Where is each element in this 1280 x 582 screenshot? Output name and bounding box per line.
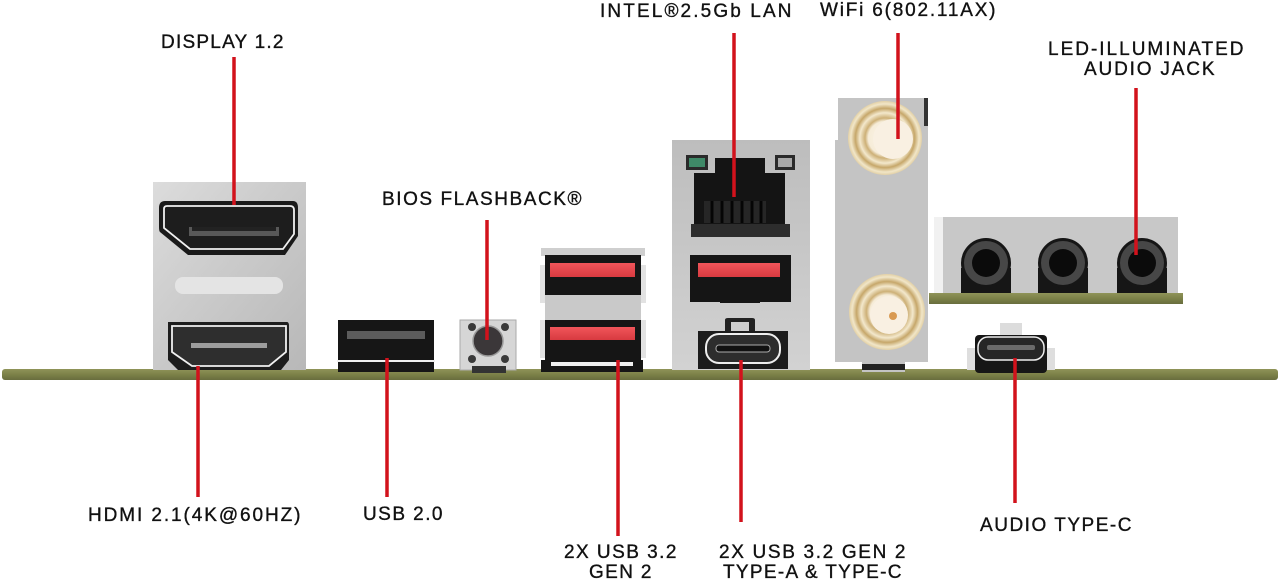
label: LED audio jack: LED-ILLUMINATED <box>1048 39 1245 60</box>
audio USB Type-C port <box>967 323 1055 373</box>
label: USB 2.0: USB 2.0 <box>363 504 444 525</box>
USB 2.0 port <box>337 320 435 372</box>
label: LED audio jack: AUDIO JACK <box>1084 59 1216 80</box>
lower USB port <box>545 320 641 360</box>
label: DisplayPort: DISPLAY 1.2 <box>161 32 285 53</box>
label: WiFi: WiFi 6(802.11AX) <box>820 0 997 21</box>
label: LAN: INTEL®2.5Gb LAN <box>600 1 793 22</box>
USB-A port <box>690 255 791 303</box>
leader line: DisplayPort <box>232 57 236 205</box>
BIOS Flashback button <box>460 320 516 373</box>
audio jack 3 <box>1117 238 1167 294</box>
label: HDMI: HDMI 2.1(4K@60HZ) <box>88 505 302 526</box>
label: USB 3.2 Type-A and Type-C <box>719 542 907 582</box>
leader line: USB 2.0 <box>385 358 389 497</box>
label: BIOS Flashback: BIOS FLASHBACK® <box>382 189 583 210</box>
label: USB 3.2 stack <box>564 542 678 582</box>
USB-C port <box>698 318 788 369</box>
leader line: audio Type-C <box>1013 358 1017 503</box>
leader line: USB 3.2 stack <box>616 360 620 536</box>
DisplayPort connector <box>159 201 298 255</box>
label: USB 3.2 Type-A and Type-C: 2X USB 3.2 GEN 2 <box>719 542 907 563</box>
audio jack module <box>929 217 1183 304</box>
label: USB 3.2 stack: 2X USB 3.2 <box>564 542 678 563</box>
lower antenna connector <box>849 274 925 350</box>
leader line: WiFi <box>896 33 900 139</box>
leader line: LAN <box>732 33 736 197</box>
leader line: BIOS Flashback <box>485 220 489 340</box>
RJ45 LAN jack <box>691 158 790 237</box>
audio jack 2 <box>1038 238 1088 294</box>
DisplayPort and HDMI port block <box>153 182 306 370</box>
leader line: USB 3.2 Type-A and Type-C <box>739 360 743 522</box>
label: audio Type-C: AUDIO TYPE-C <box>980 515 1133 536</box>
metal shield <box>672 140 810 370</box>
circuit board strip <box>2 369 1278 380</box>
upper antenna connector <box>848 101 922 175</box>
metal bracket <box>835 98 928 372</box>
WiFi antenna bracket <box>835 98 928 372</box>
HDMI connector <box>168 322 289 370</box>
upper USB port <box>545 255 641 295</box>
label: LED audio jack <box>1048 39 1245 80</box>
dual USB 3.2 Gen 2 stack <box>540 248 646 372</box>
LAN, USB-A and USB-C block <box>672 140 810 370</box>
leader line: audio jack <box>1134 88 1138 255</box>
LED indicators <box>686 155 795 170</box>
audio daughter board <box>929 293 1183 304</box>
embossed slot <box>175 277 283 294</box>
metal housing <box>943 217 1178 293</box>
leader line: HDMI <box>196 366 200 497</box>
metal shield <box>153 182 306 370</box>
audio jack 1 <box>961 238 1011 294</box>
